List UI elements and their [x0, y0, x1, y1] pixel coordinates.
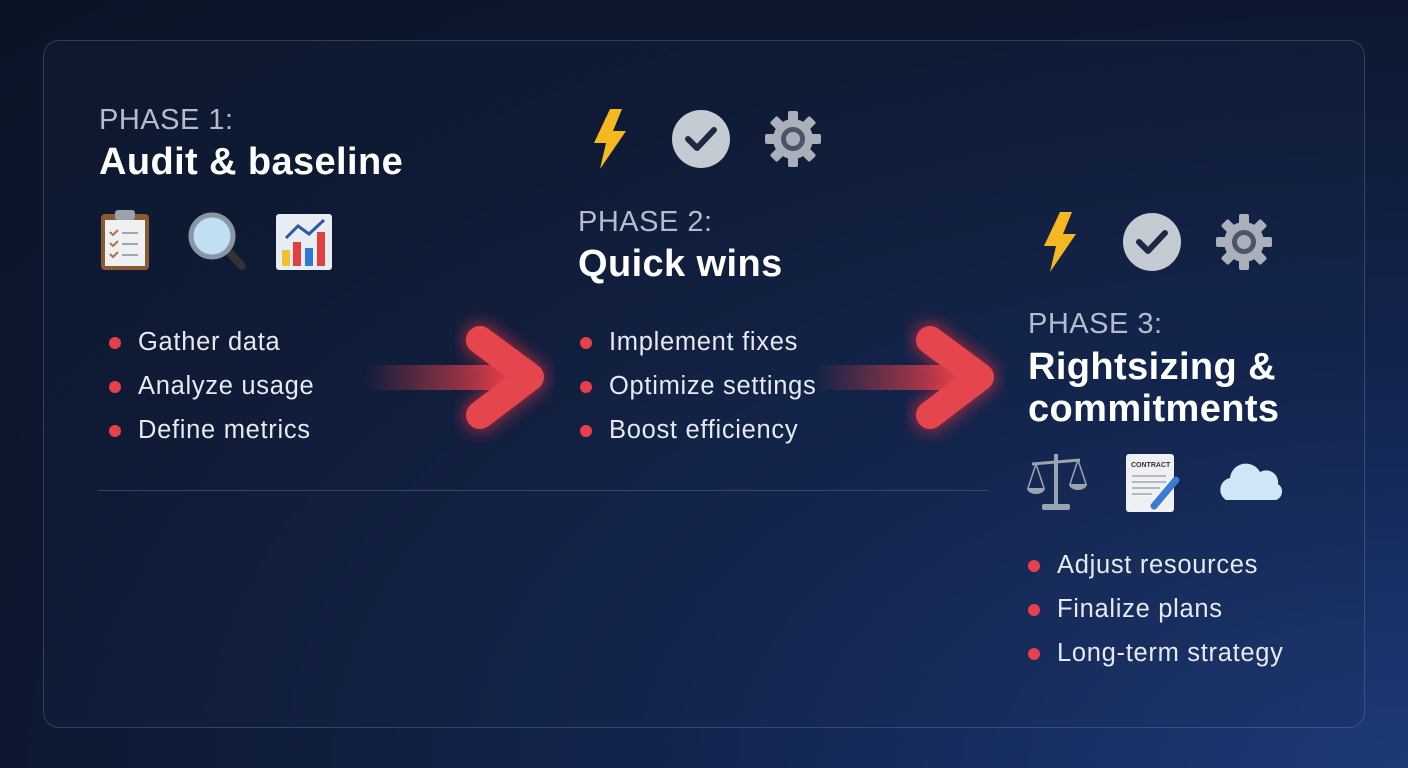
- icon: gear: [765, 111, 821, 167]
- icon: magnifier: [191, 215, 242, 266]
- phase 1 title: Audit & baseline: [99, 141, 403, 183]
- phase 1 icons: [101, 210, 332, 270]
- phase 3 bullets: [1028, 551, 1284, 667]
- phase 1 bullets: Define metrics: [138, 416, 311, 444]
- phase 2 title: Quick wins: [578, 243, 783, 285]
- icon: contract: CONTRACT: [1131, 462, 1171, 469]
- icon: contract: [1126, 454, 1176, 512]
- phase 3 label: PHASE 3:: [1028, 308, 1163, 340]
- phase 3 bullets: Adjust resources: [1057, 551, 1258, 579]
- icon: lightning: [1044, 212, 1076, 272]
- phase 3 title: [1028, 346, 1279, 430]
- phase 3 bullets: Long-term strategy: [1057, 639, 1284, 667]
- icon: gear: [1216, 214, 1272, 270]
- arrow 2: [821, 313, 1005, 442]
- phase 2 icons: [594, 109, 821, 169]
- divider: [98, 490, 988, 491]
- phase 3 bullets: Finalize plans: [1057, 595, 1223, 623]
- phase 1: [99, 104, 403, 444]
- phase 3 icons bottom: [1027, 454, 1282, 512]
- phase 1 bullets: Gather data: [138, 328, 280, 356]
- phase 1 bullets: Analyze usage: [138, 372, 314, 400]
- phase 2: [578, 109, 821, 444]
- phase 3: [1027, 212, 1284, 667]
- icon: cloud: [1220, 464, 1282, 500]
- phase 2 label: PHASE 2:: [578, 206, 713, 238]
- phase 1 bullets: [109, 328, 314, 444]
- phase 3 icons top: [1044, 212, 1272, 272]
- icon: clipboard: [101, 210, 149, 270]
- arrow 1: [371, 313, 555, 442]
- icon: check: [672, 110, 730, 168]
- phase 2 bullets: [580, 328, 816, 444]
- icon: chart: [276, 214, 332, 270]
- icon: scales: [1027, 454, 1087, 510]
- icon: check: [1123, 213, 1181, 271]
- phase 3 title: commitments: [1028, 388, 1279, 430]
- phase 2 bullets: Boost efficiency: [609, 416, 798, 444]
- phase 3 title: Rightsizing &: [1028, 346, 1276, 388]
- phase 2 bullets: Implement fixes: [609, 328, 798, 356]
- phase 1 label: PHASE 1:: [99, 104, 234, 136]
- icon: lightning: [594, 109, 626, 169]
- phase 2 bullets: Optimize settings: [609, 372, 816, 400]
